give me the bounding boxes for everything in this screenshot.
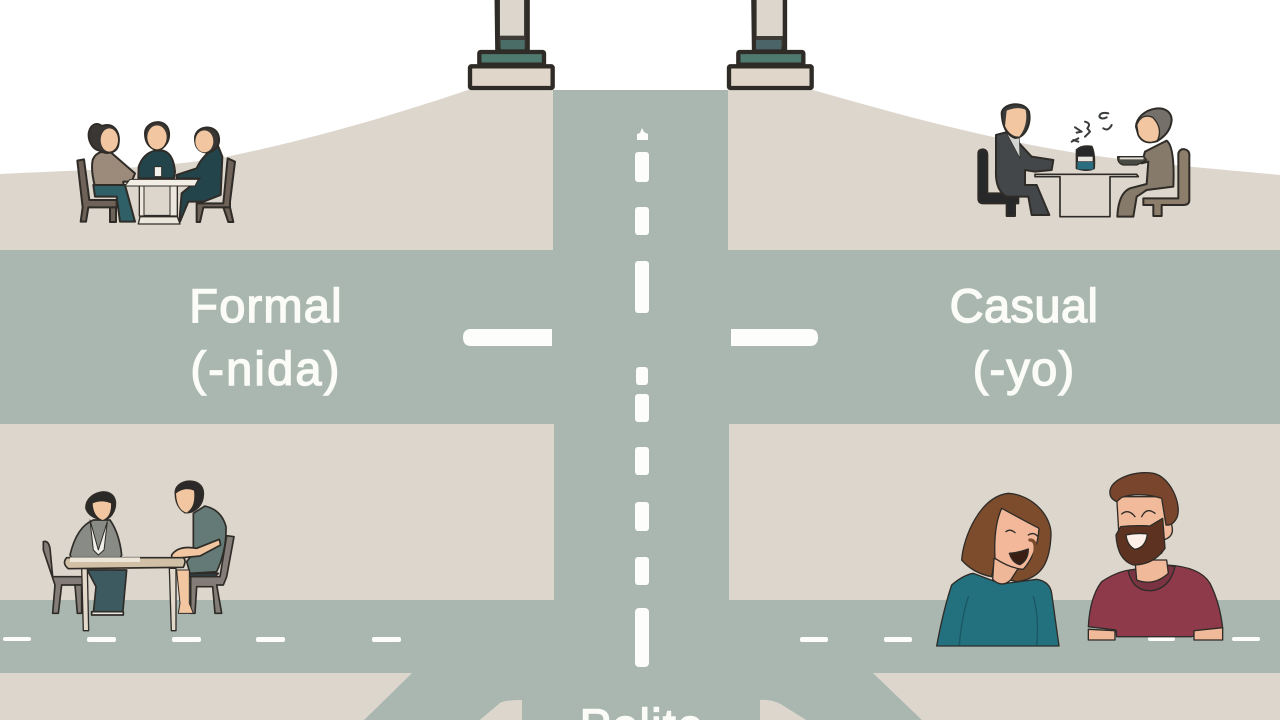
table — [139, 185, 177, 216]
right chair — [191, 536, 234, 613]
table — [82, 568, 176, 631]
land: middle right — [729, 424, 1280, 600]
label: Formal (-nida) — [189, 279, 343, 395]
scene: two people talking at a table — [43, 481, 234, 631]
road markings: horizontal stop lines — [463, 329, 818, 346]
label: Casual (-yo): Casual — [950, 279, 1098, 332]
smart speaker — [1077, 146, 1094, 170]
bowl — [1118, 157, 1147, 165]
man: hair — [1110, 473, 1178, 525]
woman: neck — [993, 558, 1019, 584]
man: mouth — [1126, 534, 1147, 549]
label: Formal (-nida): Formal — [189, 279, 343, 332]
dark chair — [978, 149, 1018, 216]
left chair — [43, 541, 85, 613]
man: neck — [1128, 565, 1175, 591]
land: lower centre islands — [480, 700, 806, 720]
scene: three colleagues in a formal meeting — [77, 122, 235, 224]
tan chair — [1143, 149, 1189, 216]
right chair — [197, 158, 235, 222]
woman: hair — [962, 493, 1051, 582]
man: beard — [1116, 518, 1165, 565]
label: Casual (-yo) — [950, 279, 1098, 395]
seated person — [1117, 141, 1174, 217]
woman: sweater — [937, 573, 1059, 646]
road markings: lower lane dashes — [3, 637, 1260, 642]
gate pillar: left — [470, 0, 553, 88]
sound notes — [1072, 113, 1112, 142]
middle person — [138, 151, 175, 178]
right person — [177, 147, 222, 222]
scene: laughing friends — [937, 473, 1223, 646]
land: middle left — [0, 424, 554, 600]
land: lower left — [0, 673, 412, 720]
scene: two people chatting beside a smart speaker — [978, 104, 1189, 217]
label: Casual (-yo): (-yo) — [973, 342, 1075, 395]
man: face — [1117, 497, 1172, 553]
woman: face — [995, 508, 1039, 569]
label: Formal (-nida): (-nida) — [190, 342, 342, 395]
man: arms — [1088, 628, 1223, 640]
man in suit — [996, 132, 1053, 215]
man: shirt — [1088, 565, 1223, 637]
left chair — [77, 159, 117, 222]
left person — [92, 151, 135, 187]
left person — [70, 520, 122, 558]
table — [1035, 174, 1138, 217]
gate pillar: right — [729, 0, 812, 88]
land: upper right — [728, 90, 1280, 250]
land: upper left — [0, 90, 553, 250]
road markings: vertical centre line — [635, 128, 649, 667]
right person — [187, 506, 226, 573]
land: lower right — [873, 673, 1280, 720]
